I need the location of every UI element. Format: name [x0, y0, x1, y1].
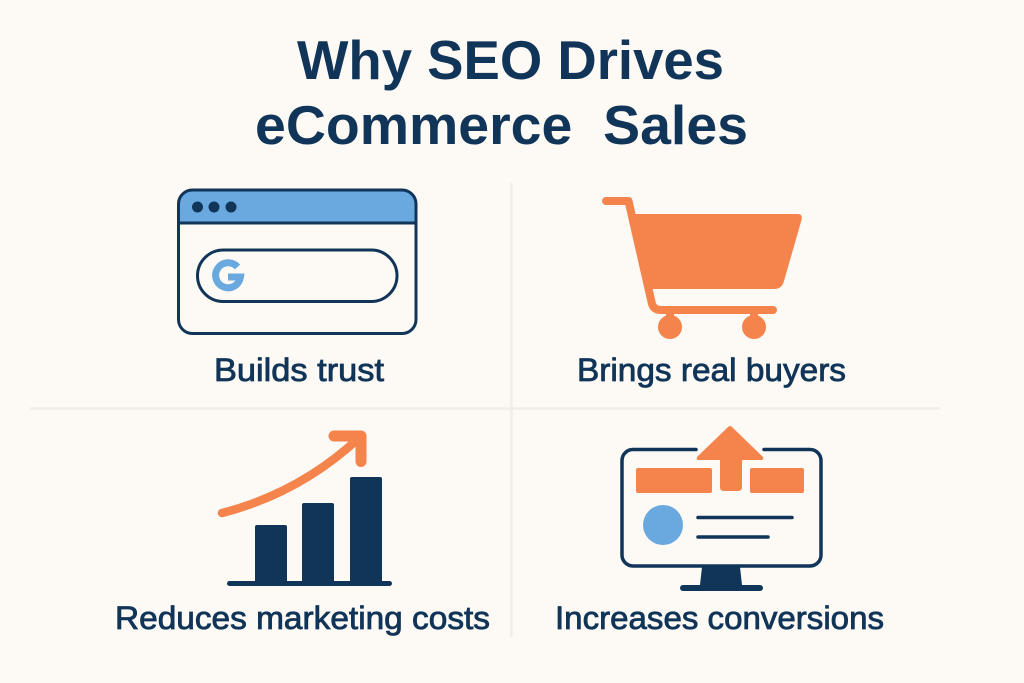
panel: builds trust — [178, 190, 416, 388]
panel: increases conversions — [555, 426, 884, 636]
title: Why SEO Drives — [297, 29, 724, 91]
icon: monitor with upward arrow — [622, 426, 821, 591]
icon: browser search window — [178, 190, 416, 334]
title: eCommerce Sales — [255, 94, 748, 156]
icon: shopping cart — [606, 201, 802, 339]
panel: brings real buyers — [577, 201, 846, 388]
label: Builds trust — [214, 352, 384, 388]
label: Reduces marketing costs — [115, 600, 490, 636]
panel: reduces marketing costs — [115, 436, 490, 636]
icon: rising bar chart with arrow — [222, 436, 392, 586]
label: Increases conversions — [555, 600, 884, 636]
title — [255, 29, 748, 156]
label: Brings real buyers — [577, 352, 846, 388]
